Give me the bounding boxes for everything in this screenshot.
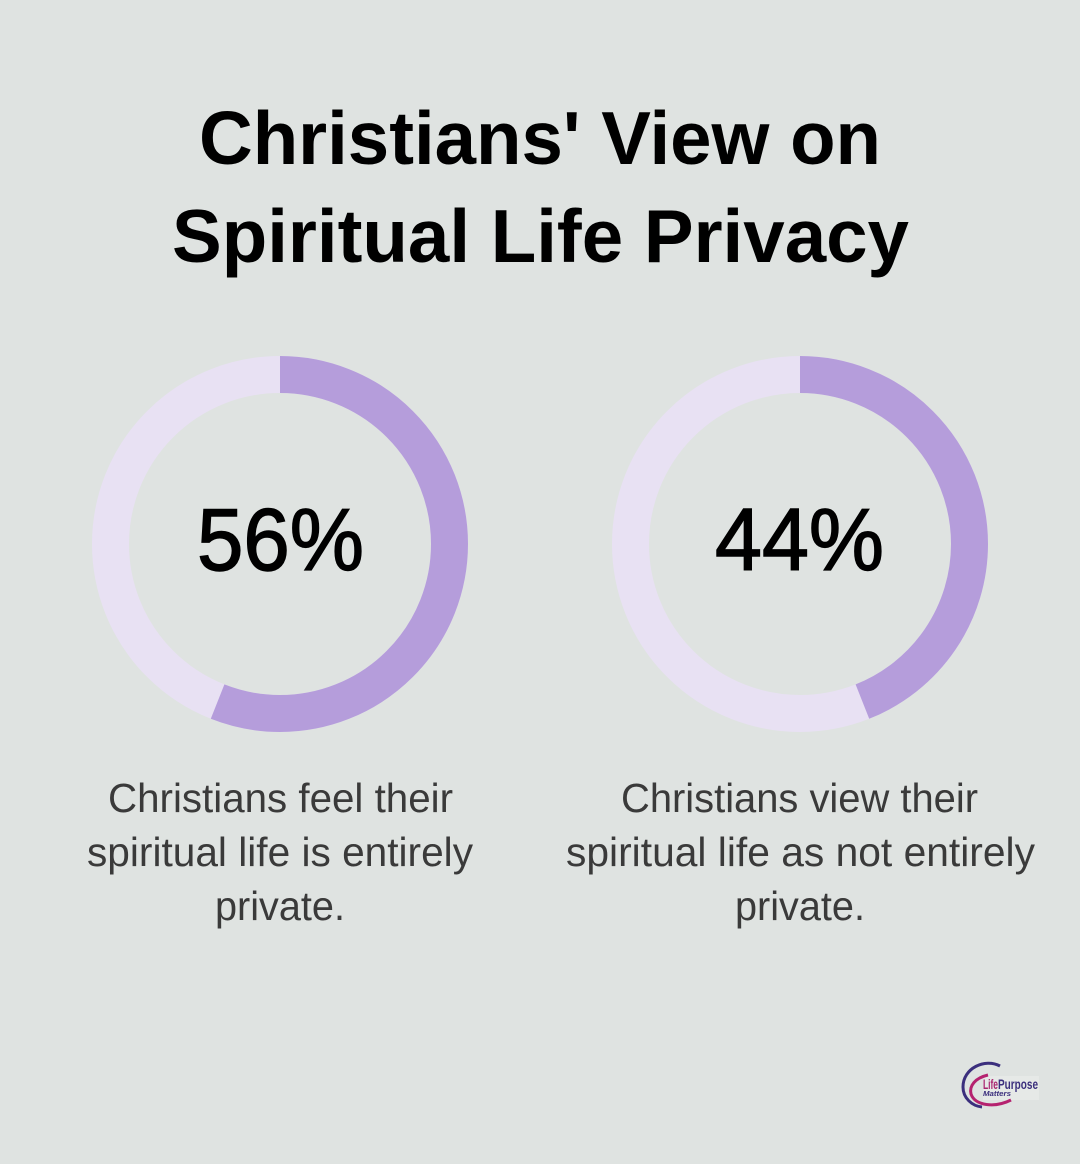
- panel: 44 percent: [566, 374, 1035, 929]
- description: 56%: [87, 775, 473, 929]
- donut chart: 56%: [110, 374, 450, 714]
- title: Spiritual Life Privacy: [172, 194, 909, 278]
- title: [172, 96, 909, 278]
- stat: 44%: 44%: [715, 490, 884, 589]
- stat: 56%: 56%: [197, 490, 364, 589]
- description: 56%: private.: [215, 883, 345, 929]
- description: 44%: Christians view their: [621, 775, 978, 821]
- logo: Life Purpose Matters: Purpose: [998, 1076, 1038, 1092]
- description: 56%: Christians feel their: [108, 775, 453, 821]
- logo: Life Purpose Matters: Life: [983, 1076, 998, 1092]
- title: Christians' View on: [199, 96, 881, 180]
- description: 44%: spiritual life as not entirely: [566, 829, 1035, 875]
- panel: 56 percent: [87, 374, 473, 929]
- description: 44%: [566, 775, 1035, 929]
- donut chart: 44%: [630, 374, 970, 714]
- logo: Life Purpose Matters: Matters: [983, 1091, 1011, 1098]
- logo: Life Purpose Matters: [963, 1063, 1039, 1107]
- description: 56%: spiritual life is entirely: [87, 829, 473, 875]
- description: 44%: private.: [735, 883, 865, 929]
